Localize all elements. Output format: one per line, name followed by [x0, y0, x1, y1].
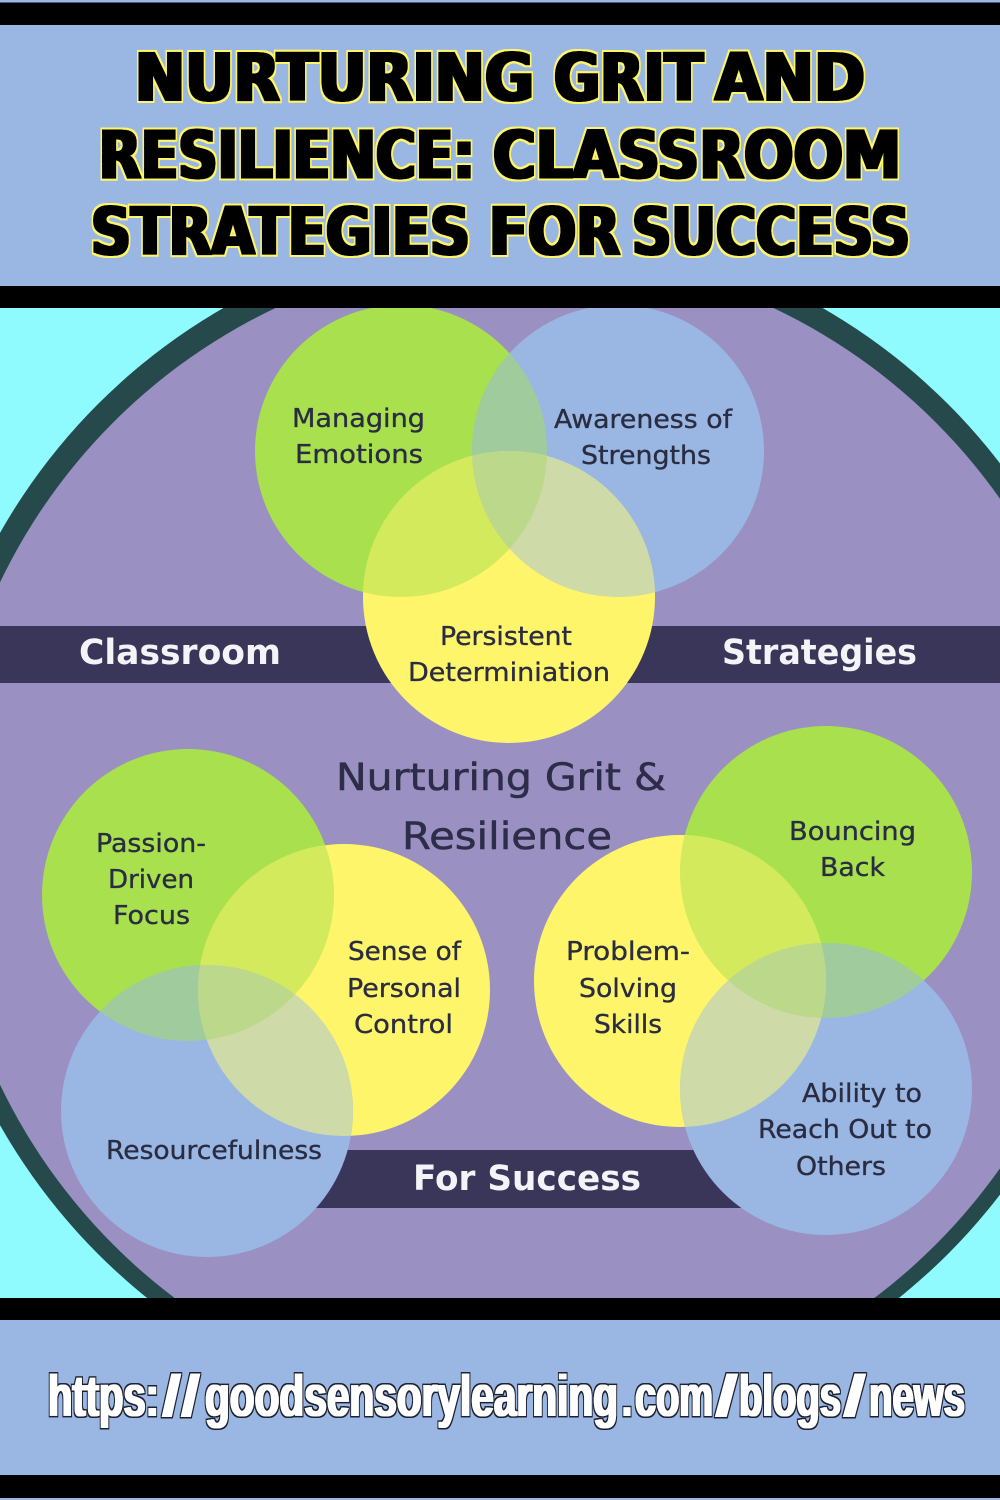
label: Resourcefulness: Resourcefulness: [106, 1136, 322, 1166]
label: Sense of Personal Control: Sense of: [348, 937, 462, 967]
url text: /: [843, 1364, 866, 1429]
top venn cluster: [255, 305, 764, 743]
left venn cluster: [42, 749, 490, 1257]
title: RESILIENCE:: [99, 117, 475, 194]
label: Ability to Reach Out to Others: Ability to: [802, 1079, 922, 1109]
label: Bouncing Back: Bouncing: [789, 817, 916, 847]
label: Sense of Personal Control: [349, 940, 462, 1034]
label: Persistent Determiniation: Persistent: [440, 622, 572, 652]
label: Problem-Solving Skills: [568, 940, 689, 1034]
label: Managing Emotions: Managing: [292, 404, 425, 434]
label: Problem-Solving Skills: Problem-: [566, 937, 690, 967]
title: AND: [715, 40, 865, 116]
label: Sense of Personal Control: Personal: [347, 974, 461, 1004]
right venn cluster: [534, 726, 972, 1235]
title: CLASSROOM: [493, 117, 901, 194]
large ringed circle: [0, 308, 1000, 1298]
title: GRIT: [554, 40, 703, 116]
label: Passion-Driven Focus: Passion-: [96, 829, 206, 859]
label: Persistent Determiniation: Determiniation: [408, 658, 610, 688]
label: Ability to Reach Out to Others: Reach Out to: [758, 1115, 932, 1145]
band: For Success: For Success: [413, 1159, 641, 1199]
title: [91, 40, 910, 270]
title: NURTURING: [135, 40, 534, 116]
title: STRATEGIES: [91, 194, 470, 270]
title: FOR: [489, 194, 620, 270]
header panel: [0, 0, 1000, 308]
url text: https:: [48, 1364, 159, 1429]
label: Managing Emotions: [294, 407, 423, 464]
url text: /: [715, 1364, 738, 1429]
band: For Success: [316, 1150, 742, 1208]
label: Ability to Reach Out to Others: Others: [796, 1152, 886, 1182]
label: Bouncing Back: [792, 820, 914, 876]
url text: .: [622, 1364, 632, 1429]
url text: com: [635, 1364, 713, 1429]
footer panel: [0, 1298, 1000, 1500]
url text: blogs: [739, 1364, 841, 1429]
central title: Nurturing Grit &: [336, 756, 666, 799]
label: Problem-Solving Skills: Skills: [594, 1010, 662, 1040]
label: Passion-Driven Focus: Driven: [108, 865, 194, 895]
label: Passion-Driven Focus: Focus: [113, 901, 190, 931]
diagram panel: [0, 308, 1000, 1298]
band: Classroom Strategies: Classroom: [79, 633, 281, 673]
label: Managing Emotions: Emotions: [295, 440, 423, 470]
label: Awareness of Strengths: Strengths: [581, 441, 711, 471]
label: Ability to Reach Out to Others: [760, 1082, 931, 1176]
label: Bouncing Back: Back: [820, 853, 885, 883]
central title: Resilience: [402, 815, 612, 858]
label: Awareness of Strengths: [554, 405, 733, 471]
label: Problem-Solving Skills: Solving: [579, 974, 677, 1004]
label: Sense of Personal Control: Control: [354, 1010, 453, 1040]
band: Classroom Strategies: Strategies: [722, 633, 917, 673]
label: Passion-Driven Focus: [98, 832, 205, 924]
url text: //: [162, 1364, 200, 1429]
central title: [340, 761, 666, 850]
title: SUCCESS: [632, 194, 910, 270]
band: Classroom Strategies: [0, 626, 1000, 683]
label: Persistent Determiniation: [410, 625, 608, 682]
url text: goodsensorylearning: [205, 1364, 618, 1429]
label: Awareness of Strengths: Awareness of: [554, 405, 733, 435]
